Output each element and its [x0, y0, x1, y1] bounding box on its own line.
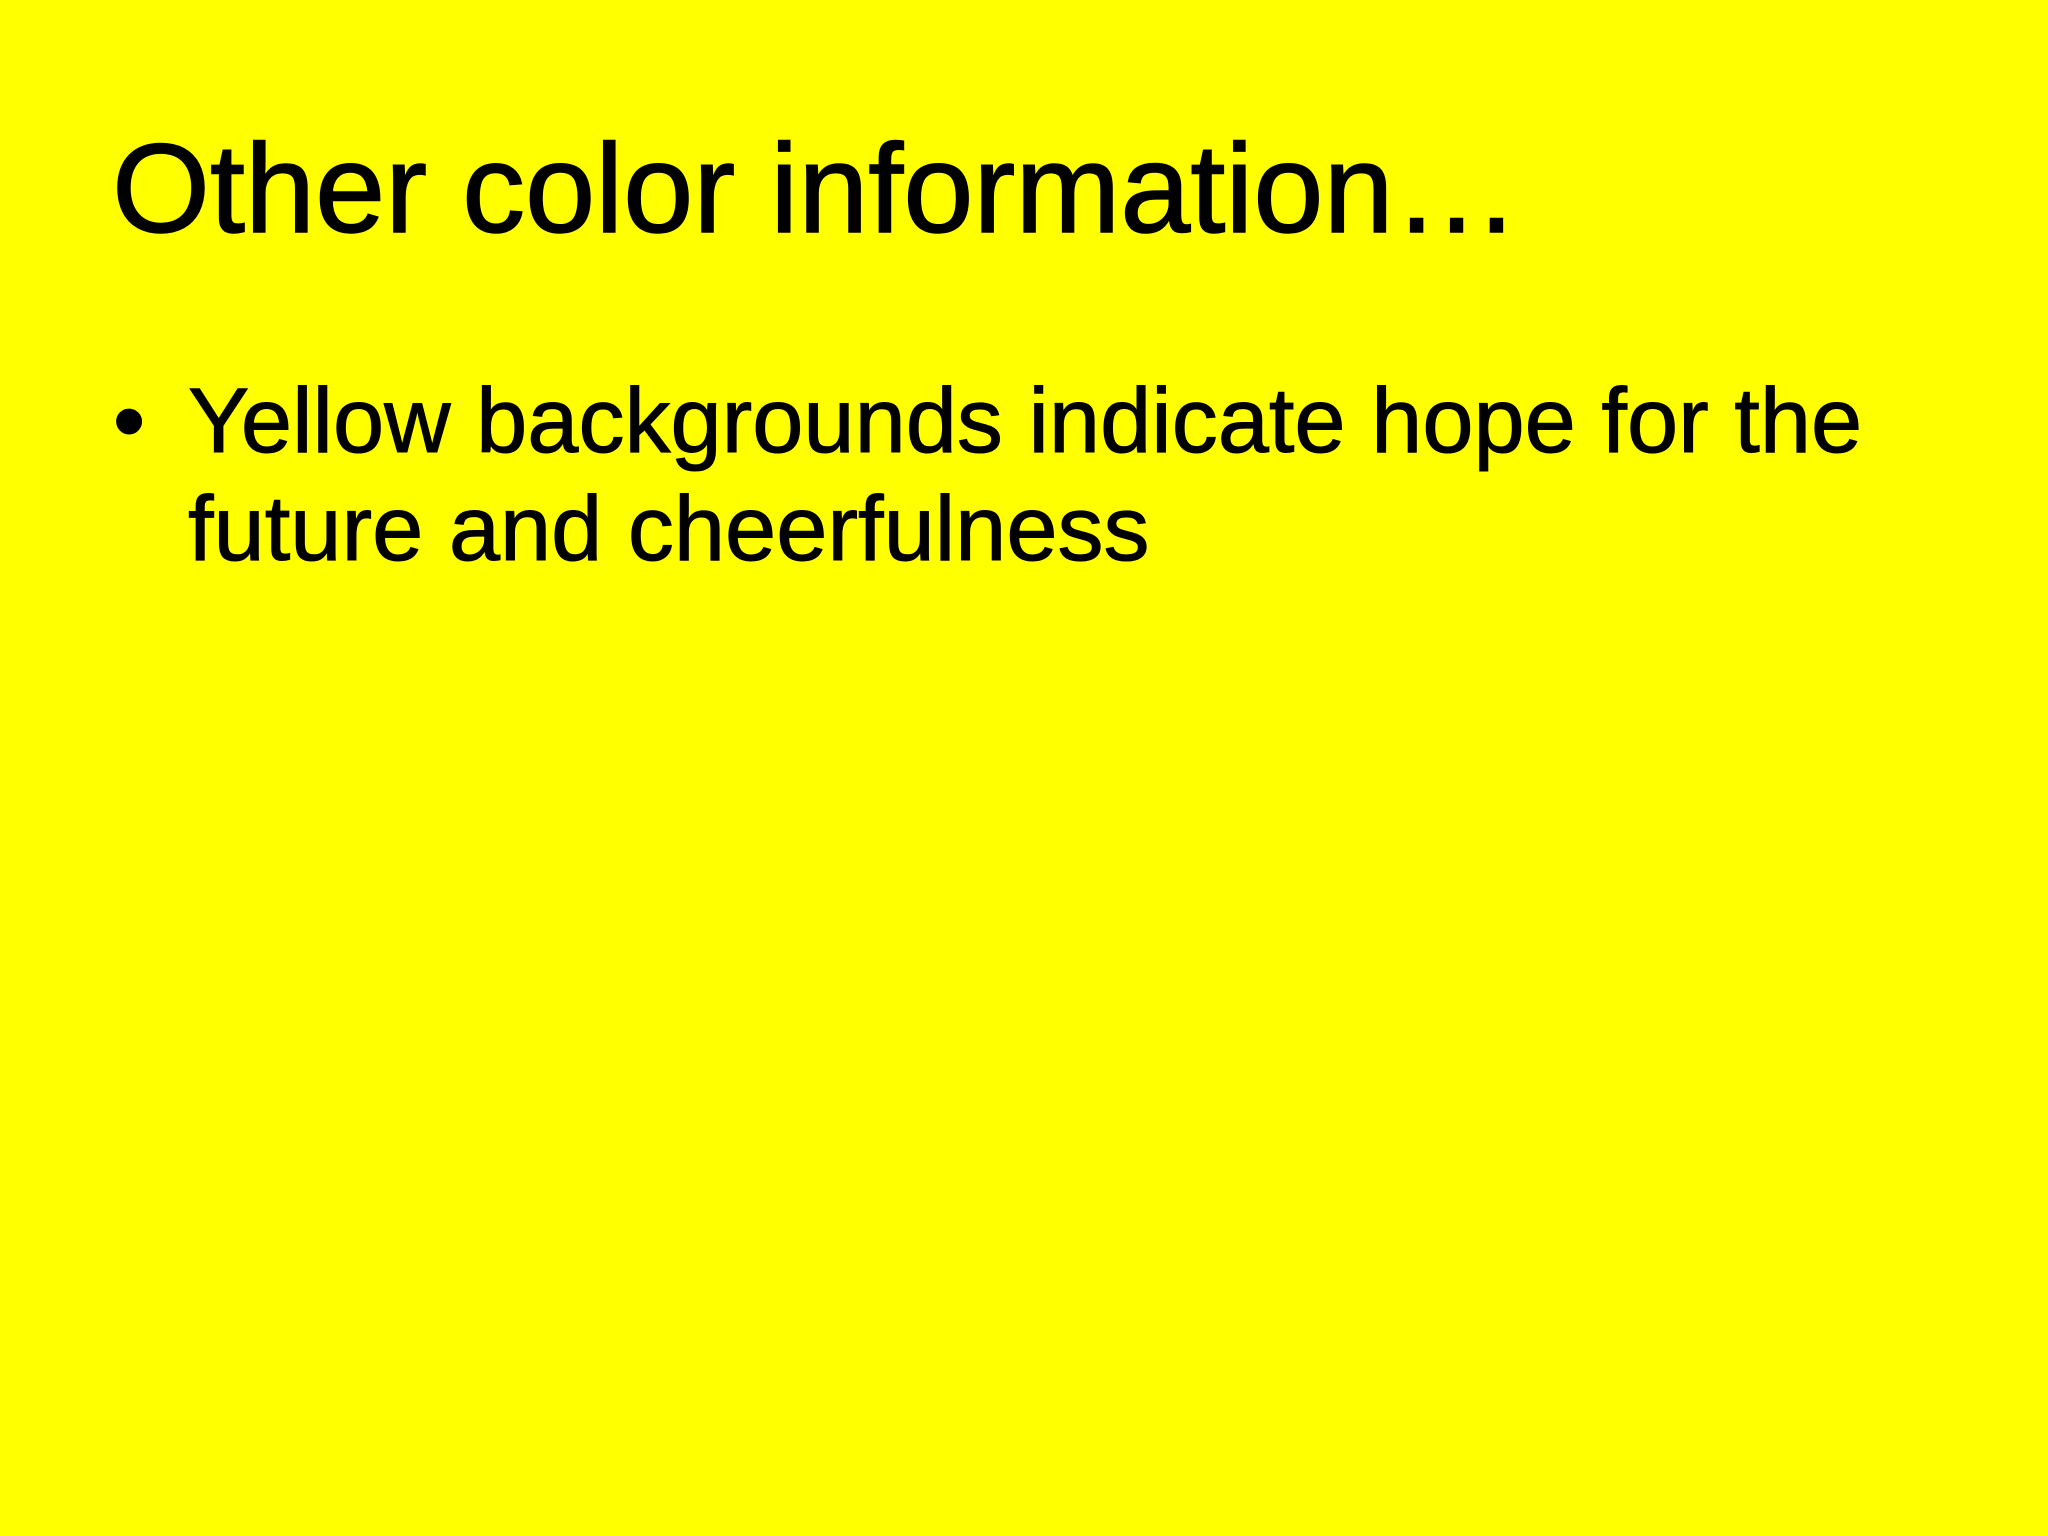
bullet list	[113, 370, 1862, 580]
bullet text: future and cheerfulness	[188, 478, 1150, 580]
bullet text	[188, 370, 1862, 580]
title: Other color information…	[112, 118, 1520, 259]
bullet marker: •	[113, 370, 145, 472]
bullet text: Yellow backgrounds indicate hope for the	[188, 370, 1862, 472]
